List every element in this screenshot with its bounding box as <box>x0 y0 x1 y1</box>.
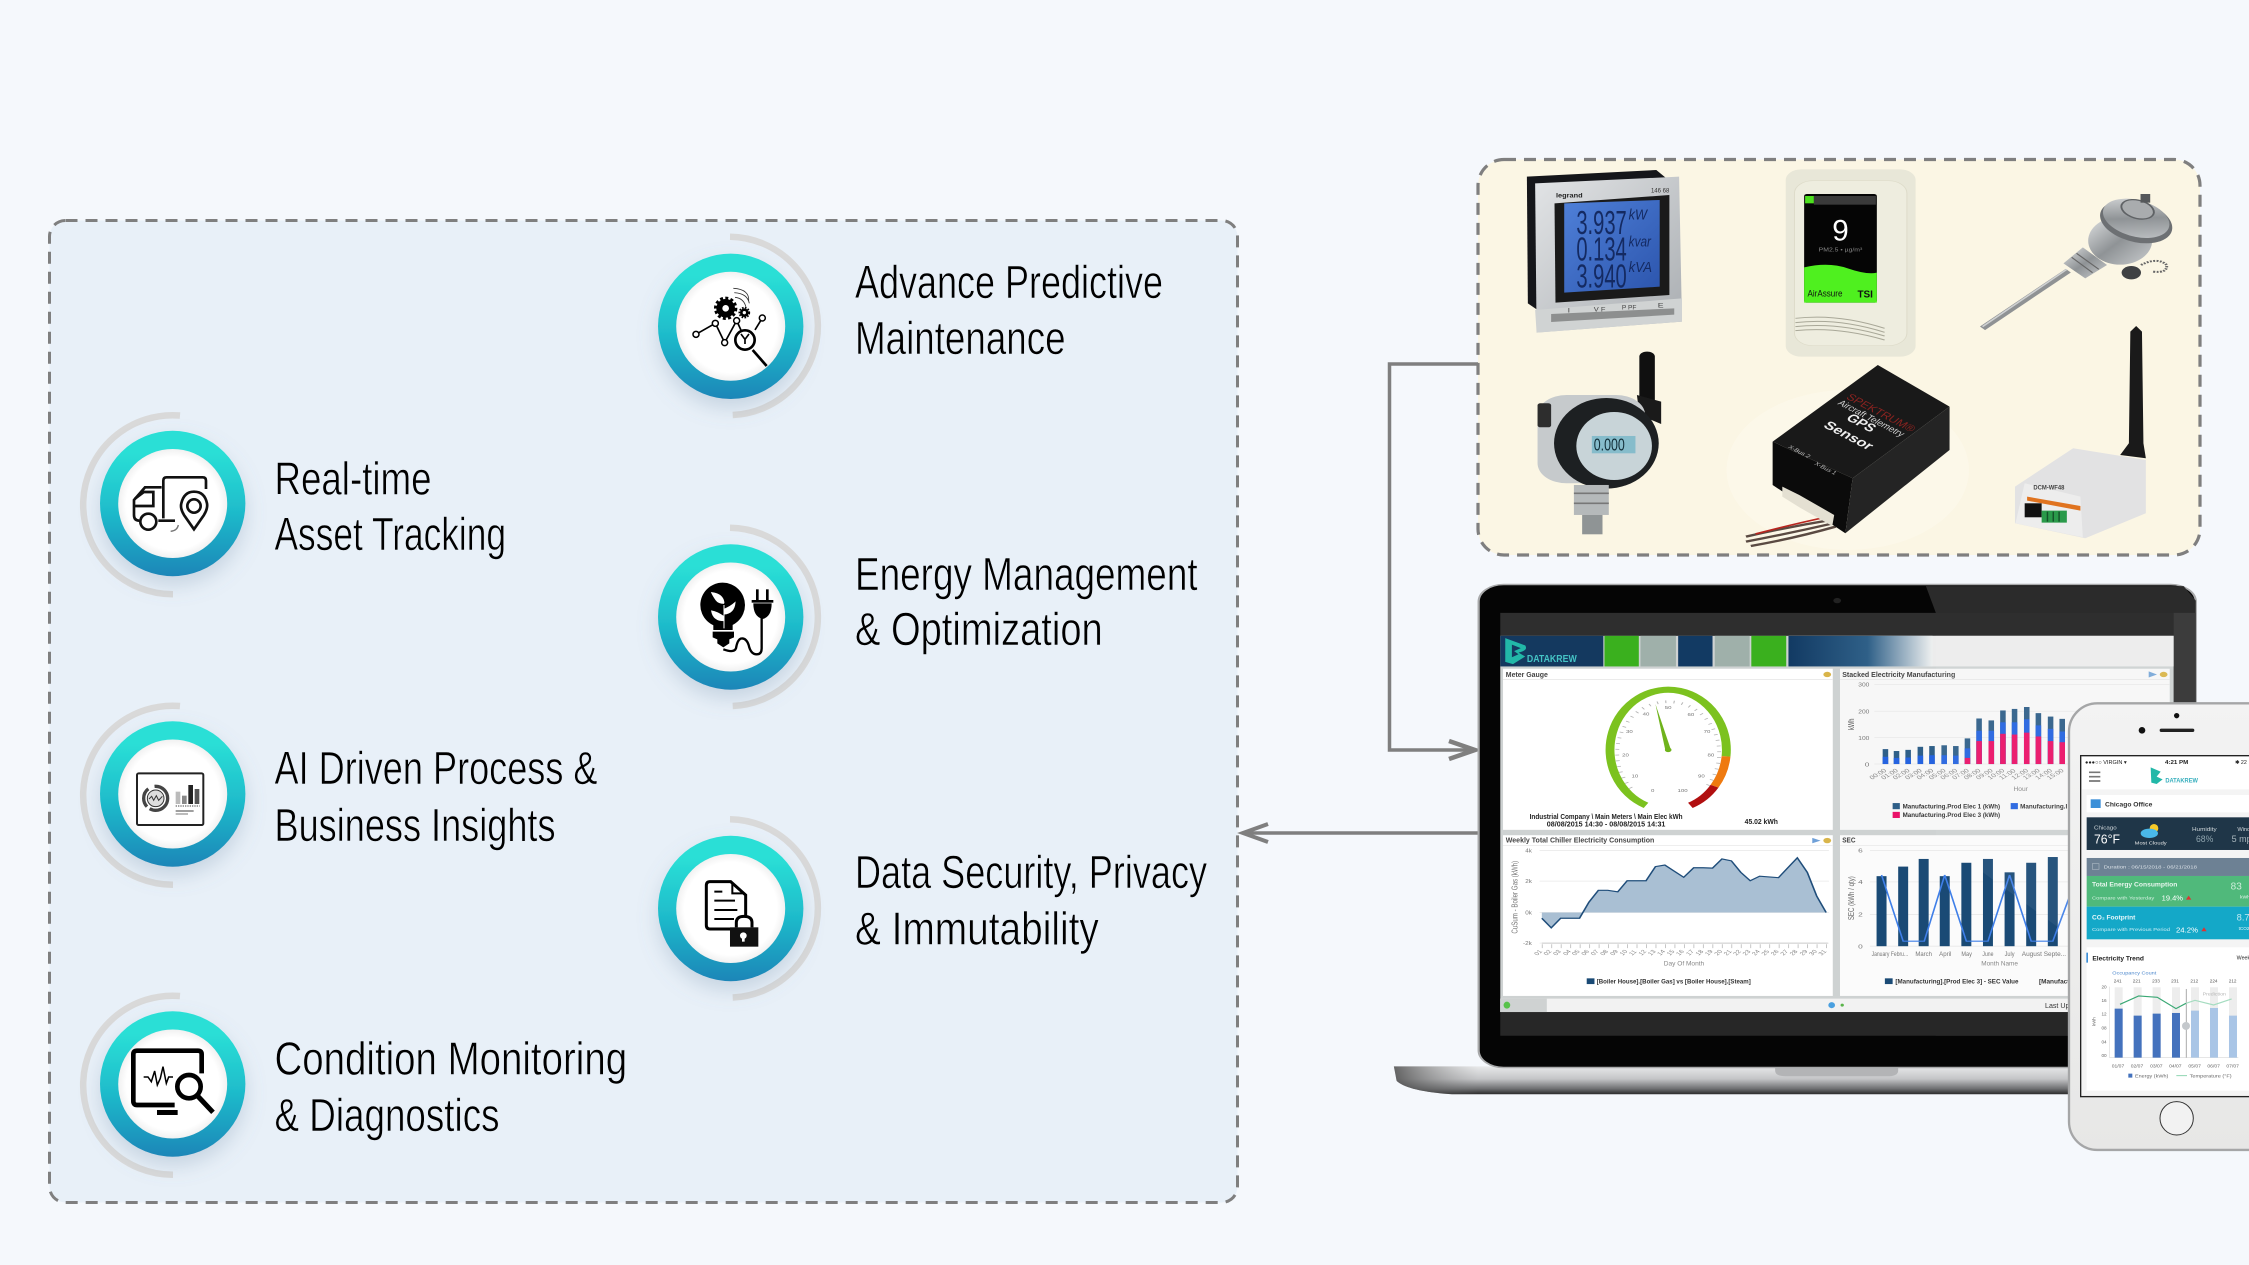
chart: weekly chiller consumption: 20 <box>1713 949 1725 957</box>
chart: weekly chiller consumption: -2k <box>1523 940 1532 947</box>
chart: meter gauge: 20 <box>1622 753 1629 758</box>
icon: eco bulb and plug <box>700 583 773 654</box>
chart: stacked electricity: Manufacturing.I <box>2020 803 2067 810</box>
device: air quality monitor <box>1786 169 1916 357</box>
icon: predictive maintenance <box>693 288 767 366</box>
chart: stacked electricity: 09:00 <box>1975 768 1995 781</box>
item: AI Driven Process & Business Insights <box>83 706 598 885</box>
header bar <box>1500 636 2174 666</box>
label: Advance Predictive <box>855 256 1163 308</box>
chart: meter gauge: Industrial Company \ Main Meters \ Main Elec kWh <box>1530 812 1683 820</box>
chart: stacked electricity: 00:00 <box>1868 768 1889 781</box>
label <box>855 256 1163 364</box>
chart: weekly chiller consumption: 14 <box>1656 949 1668 957</box>
chart: SEC: May <box>1961 951 1972 958</box>
chart: meter gauge: 30 <box>1626 730 1633 735</box>
chart: SEC: August Septe... <box>2022 951 2066 958</box>
electricity trend chart: 212 <box>2190 978 2199 983</box>
chart: stacked electricity <box>1840 669 2170 830</box>
chart: stacked electricity: 12:00 <box>2010 768 2031 781</box>
carbon card: CO₂ Footprint <box>2092 914 2136 921</box>
chart: SEC: [Manufact <box>2039 978 2070 985</box>
chart: SEC: Month Name <box>1981 960 2018 967</box>
electricity trend chart: 16 <box>2101 998 2107 1003</box>
device: GPS sensor <box>1727 365 1969 550</box>
device: power meter: I <box>1568 307 1570 314</box>
chart: weekly chiller consumption: 15 <box>1665 949 1677 957</box>
item: Advance Predictive Maintenance <box>658 237 1163 415</box>
chart: SEC: 4 <box>1858 879 1863 886</box>
chart: SEC: SEC <box>1842 836 1856 845</box>
chart: weekly chiller consumption: 01 <box>1533 949 1545 957</box>
chart: stacked electricity: 200 <box>1858 709 1869 715</box>
chart: weekly chiller consumption: 4k <box>1525 848 1532 854</box>
chart: weekly chiller consumption: 18 <box>1694 949 1706 957</box>
chart: meter gauge: 50 <box>1665 706 1672 711</box>
icon: dashboard screen <box>137 773 203 825</box>
chart: SEC: July <box>2005 951 2015 958</box>
footer bar <box>1500 999 2174 1012</box>
electricity trend chart: Occupancy Count <box>2112 970 2157 976</box>
chart: meter gauge: 80 <box>1707 753 1714 758</box>
electricity trend chart: 212 <box>2229 978 2237 983</box>
chart: meter gauge: 90 <box>1698 774 1705 779</box>
device: wireless pressure transmitter: 0.000 <box>1594 435 1625 455</box>
electricity trend chart: 231 <box>2171 978 2179 983</box>
panel: capabilities <box>50 220 1238 1202</box>
electricity trend chart: Temperature (°F) <box>2190 1073 2232 1079</box>
electricity trend chart: 07/07 <box>2226 1063 2239 1069</box>
device: wireless pressure transmitter <box>1538 352 1661 534</box>
chart: weekly chiller consumption: 05 <box>1571 949 1582 957</box>
chart: meter gauge: 60 <box>1688 713 1694 717</box>
laptop: dashboard <box>1394 585 2196 1094</box>
app logo: DATAKREW <box>2165 777 2198 784</box>
dashboard screen <box>1500 636 2174 1012</box>
electricity trend chart: 03/07 <box>2150 1063 2163 1069</box>
chart: weekly chiller consumption: 24 <box>1751 949 1763 957</box>
label: AI Driven Process & <box>274 742 598 794</box>
icon: document and padlock <box>706 882 758 947</box>
label: Asset Tracking <box>274 508 506 560</box>
electricity trend chart: Electricity Trend <box>2092 955 2144 962</box>
label: Condition Monitoring <box>274 1032 627 1084</box>
chart: weekly chiller consumption: 27 <box>1779 949 1791 957</box>
weather band: Humidity <box>2192 827 2217 833</box>
energy card: Total Energy Consumption <box>2092 882 2177 889</box>
electricity trend chart: kWh <box>2091 1017 2096 1026</box>
label <box>855 548 1198 655</box>
chart: weekly chiller consumption: 30 <box>1808 949 1820 957</box>
arrow: dashboard to capabilities panel <box>1243 824 1480 842</box>
chart: weekly chiller consumption: 29 <box>1798 949 1810 957</box>
chart: weekly chiller consumption: 08 <box>1599 949 1611 957</box>
energy card: 19.4% <box>2162 894 2183 903</box>
app screen <box>2081 756 2249 1097</box>
header bar: DATAKREW <box>1527 653 1577 664</box>
phone body <box>2069 703 2249 1150</box>
item: Condition Monitoring & Diagnostics <box>83 996 627 1175</box>
icon: truck with location pin <box>134 477 207 531</box>
device: power meter: E <box>1658 302 1664 309</box>
chart: weekly chiller consumption: 04 <box>1562 949 1574 957</box>
electricity trend chart: Energy (kWh) <box>2135 1073 2169 1079</box>
electricity trend chart: 20 <box>2101 984 2107 989</box>
electricity trend chart: Prediction <box>2203 992 2226 997</box>
electricity trend chart: 04/07 <box>2169 1063 2182 1069</box>
carbon card <box>2087 907 2249 939</box>
energy card: Compare with Yesterday <box>2092 895 2155 901</box>
device: air quality monitor: TSI <box>1857 289 1873 300</box>
chart: stacked electricity: 01:00 <box>1880 768 1900 781</box>
chart: SEC: SEC (kWh / qty) <box>1847 876 1856 920</box>
label <box>274 1032 627 1141</box>
device: power meter: kW <box>1629 206 1648 223</box>
item: Energy Management & Optimization <box>658 528 1198 706</box>
device: power meter: kvar <box>1629 233 1652 250</box>
panel: IoT devices <box>1478 160 2200 555</box>
device: power meter: legrand <box>1556 191 1583 199</box>
electricity trend chart: 08 <box>2101 1025 2107 1030</box>
device: GPS sensor: Aircraft Telemetry <box>1835 399 1907 439</box>
electricity trend chart: 12 <box>2101 1012 2107 1017</box>
footer bar: Last Up <box>2045 1002 2070 1010</box>
smartphone: mobile app <box>2069 703 2249 1150</box>
chart: meter gauge: 10 <box>1632 774 1638 779</box>
chart: stacked electricity: Manufacturing.Prod Elec 3 (kWh) <box>1903 812 2000 819</box>
weather band: 76°F <box>2094 832 2120 846</box>
electricity trend chart <box>2086 947 2249 1091</box>
chart: stacked electricity: 06:00 <box>1939 768 1960 781</box>
laptop shell <box>1394 585 2196 1094</box>
chart: weekly chiller consumption: 19 <box>1704 949 1715 957</box>
electricity trend chart: 01/07 <box>2112 1063 2124 1069</box>
chart: weekly chiller consumption: 02 <box>1542 949 1554 957</box>
device: power meter: kVA <box>1629 258 1652 275</box>
device: wireless module: DCM-WF48 <box>2033 483 2065 491</box>
label: & Immutability <box>855 902 1099 954</box>
chart: stacked electricity: 07:00 <box>1951 768 1971 781</box>
item: Data Security, Privacy & Immutability <box>658 819 1207 998</box>
device: air quality monitor: 9 <box>1832 214 1849 247</box>
chart: meter gauge: 70 <box>1704 730 1710 735</box>
chart: weekly chiller consumption: 09 <box>1609 949 1621 957</box>
chart: weekly chiller consumption: 28 <box>1788 949 1800 957</box>
label: & Optimization <box>855 603 1103 655</box>
weather band <box>2087 817 2249 850</box>
electricity trend chart: 241 <box>2114 978 2122 983</box>
label <box>855 846 1207 954</box>
status bar: ●●●○○ VIRGIN ▾ <box>2085 760 2127 766</box>
device: air quality monitor: AirAssure <box>1808 289 1842 299</box>
status bar: ✱ 22 <box>2235 760 2247 766</box>
chart: stacked electricity: Manufacturing.Prod Elec 1 (kWh) <box>1903 803 2000 810</box>
chart: weekly chiller consumption <box>1503 835 1833 996</box>
chart: weekly chiller consumption: 26 <box>1770 949 1781 957</box>
device: air quality monitor: PM2.5 • µg/m³ <box>1819 247 1863 253</box>
chart: SEC: January Febru... <box>1872 951 1908 958</box>
chart: stacked electricity: 10:00 <box>1986 768 2007 781</box>
status bar <box>2085 760 2247 766</box>
chart: meter gauge: 08/08/2015 14:30 - 08/08/2015 14:31 <box>1547 820 1665 828</box>
label: & Diagnostics <box>274 1089 500 1141</box>
chart: meter gauge <box>1503 669 1833 830</box>
icon: monitor with magnifier <box>133 1051 213 1115</box>
chart: stacked electricity: Stacked Electricity Manufacturing <box>1842 670 1955 679</box>
device: power meter: 3.940 <box>1576 257 1627 295</box>
chart: meter gauge: 100 <box>1678 789 1688 794</box>
duration band: Duration : 06/15/2018 - 06/21/2018 <box>2104 864 2197 870</box>
device: GPS sensor: Sensor <box>1820 418 1878 452</box>
office row <box>2087 795 2249 812</box>
chart: meter gauge: 0 <box>1651 789 1654 794</box>
chart: stacked electricity: 14:00 <box>2034 768 2054 781</box>
label: Maintenance <box>855 312 1066 364</box>
chart: stacked electricity: 05:00 <box>1928 768 1948 781</box>
chart: SEC: [Manufacturing].[Prod Elec 3] - SEC Value <box>1895 978 2019 985</box>
label: Real-time <box>274 453 432 505</box>
weather band: 68% <box>2196 834 2213 844</box>
carbon card: 24.2% <box>2176 925 2198 934</box>
chart: weekly chiller consumption: 13 <box>1647 949 1658 957</box>
device: power meter: P PF <box>1622 304 1637 311</box>
label: Data Security, Privacy <box>855 846 1207 898</box>
device: power meter <box>1527 170 1682 333</box>
chart: stacked electricity: 08:00 <box>1963 768 1983 781</box>
chart: weekly chiller consumption: Weekly Total Chiller Electricity Consumption <box>1506 836 1654 845</box>
weather band: Most Cloudy <box>2135 840 2167 846</box>
chart: weekly chiller consumption: 31 <box>1817 949 1829 957</box>
office row: Chicago Office <box>2105 802 2153 809</box>
device: GPS sensor: SPEKTRUM® <box>1843 392 1919 435</box>
chart: weekly chiller consumption: 23 <box>1741 949 1753 957</box>
chart: stacked electricity: 04:00 <box>1915 768 1936 781</box>
electricity trend chart: 224 <box>2210 978 2218 983</box>
electricity trend chart: 05/07 <box>2188 1063 2201 1069</box>
chart: weekly chiller consumption: Day Of Month <box>1664 960 1704 967</box>
chart: weekly chiller consumption: 22 <box>1732 949 1744 957</box>
chart: SEC: 0 <box>1858 944 1863 950</box>
device: temperature probe <box>1983 191 2184 328</box>
chart: meter gauge: Meter Gauge <box>1506 670 1548 679</box>
chart: SEC <box>1840 835 2170 996</box>
electricity trend chart: 06/07 <box>2207 1063 2220 1069</box>
chart: SEC: 6 <box>1858 848 1863 854</box>
chart: weekly chiller consumption: 2k <box>1525 878 1532 885</box>
chart: weekly chiller consumption: [Boiler House].[Boiler Gas] vs [Boiler House].[Steam] <box>1597 978 1751 985</box>
chart: meter gauge: 40 <box>1643 712 1650 717</box>
status bar: 4:21 PM <box>2165 760 2189 766</box>
chart: weekly chiller consumption: 16 <box>1675 949 1687 957</box>
chart: weekly chiller consumption: 07 <box>1589 949 1601 957</box>
chart: meter gauge: 45.02 kWh <box>1745 818 1778 826</box>
device: power meter: 146 68 <box>1651 187 1669 194</box>
chart: SEC: March <box>1915 951 1932 958</box>
weather band: Chicago <box>2094 825 2117 831</box>
chart: stacked electricity: 03:00 <box>1904 768 1924 781</box>
device: GPS sensor: X-Bus 1 <box>1812 461 1838 477</box>
chart: stacked electricity: kWh <box>1847 718 1856 730</box>
chart: stacked electricity: 300 <box>1858 682 1869 688</box>
chart: weekly chiller consumption: 25 <box>1760 949 1772 957</box>
chart: stacked electricity: 13:00 <box>2022 768 2042 781</box>
device: power meter: V F <box>1594 306 1606 313</box>
device: wireless module <box>2015 326 2146 538</box>
chart: weekly chiller consumption: 0k <box>1525 910 1532 916</box>
chart: weekly chiller consumption: 21 <box>1722 949 1734 957</box>
chart: weekly chiller consumption: 17 <box>1685 949 1697 957</box>
electricity trend chart: 00 <box>2101 1053 2107 1058</box>
electricity trend chart: 02/07 <box>2131 1063 2143 1069</box>
carbon card: Compare with Previous Period <box>2092 927 2170 933</box>
chart: SEC: June <box>1982 951 1993 958</box>
chart: weekly chiller consumption: 10 <box>1618 949 1630 957</box>
electricity trend chart: 233 <box>2152 978 2160 983</box>
label: Energy Management <box>855 548 1198 600</box>
screen glare <box>1936 636 2174 1012</box>
chart: stacked electricity: 100 <box>1858 735 1869 742</box>
chart: weekly chiller consumption: 06 <box>1580 949 1592 957</box>
menu icon <box>2089 772 2100 781</box>
chart: stacked electricity: 0 <box>1865 762 1869 768</box>
energy card <box>2087 876 2249 907</box>
device: power meter: 0.134 <box>1576 230 1627 268</box>
chart: weekly chiller consumption: 12 <box>1637 949 1649 957</box>
duration band <box>2087 858 2249 876</box>
device: power meter: 3.937 <box>1576 204 1627 241</box>
label <box>274 453 506 560</box>
device: GPS sensor: GPS <box>1843 411 1880 434</box>
chart: weekly chiller consumption: 11 <box>1628 949 1639 957</box>
chart: stacked electricity: Hour <box>2013 785 2028 792</box>
chart: SEC: April <box>1939 951 1952 958</box>
chart: SEC: 2 <box>1858 912 1863 918</box>
connector: devices to dashboard <box>1390 364 1478 759</box>
chart: weekly chiller consumption: 03 <box>1552 949 1564 957</box>
label <box>274 742 598 851</box>
energy card: 83 <box>2231 881 2242 892</box>
electricity trend chart: 221 <box>2133 978 2141 983</box>
device: GPS sensor: X-Bus 2 <box>1786 444 1812 460</box>
electricity trend chart: 04 <box>2101 1039 2107 1044</box>
label: Business Insights <box>274 799 556 851</box>
app logo <box>2151 767 2198 784</box>
chart: stacked electricity: 11:00 <box>1998 768 2018 781</box>
chart: weekly chiller consumption: CuSum - Boiler Gas (kWh) <box>1510 861 1520 934</box>
item: Real-time Asset Tracking <box>83 415 506 594</box>
chart: stacked electricity: 15:00 <box>2046 768 2066 781</box>
chart: stacked electricity: 02:00 <box>1892 768 1912 781</box>
